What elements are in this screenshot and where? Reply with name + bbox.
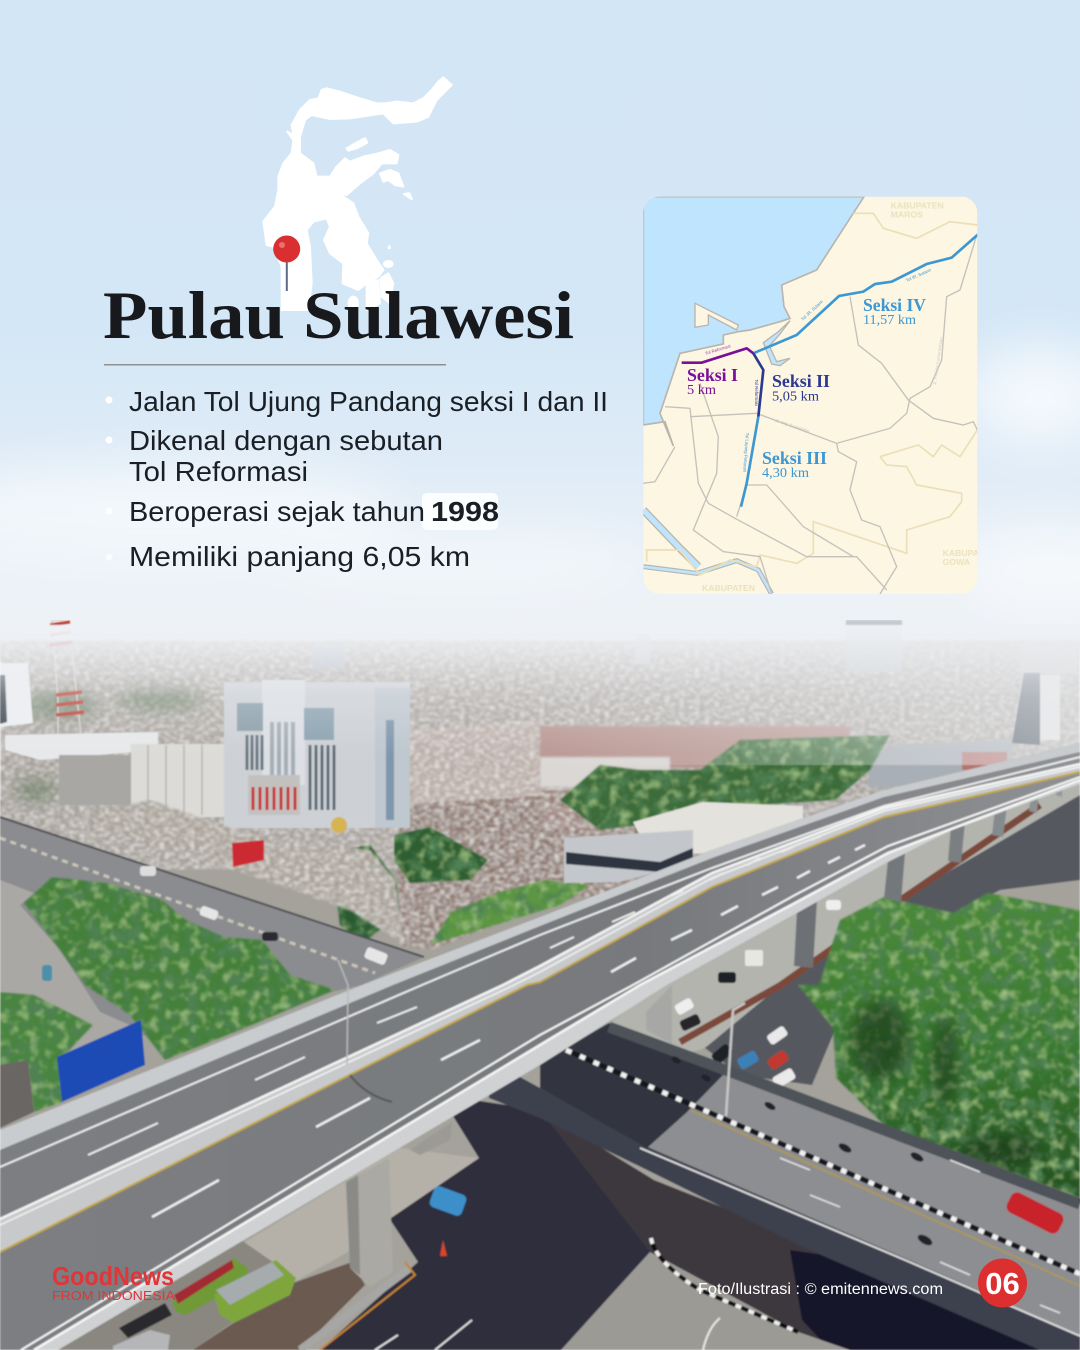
bay [763, 321, 790, 366]
under-deck pavement right [560, 780, 1080, 1060]
deck [0, 743, 1080, 1350]
green truck [214, 1260, 296, 1323]
harbour pier [695, 303, 738, 330]
light pavement [240, 1148, 479, 1285]
left road with median [0, 817, 424, 1065]
red car [1004, 1190, 1066, 1236]
right low buildings [868, 740, 1012, 787]
blue-stripe building [564, 830, 693, 883]
side face [489, 1060, 1080, 1350]
lamp post on deck [338, 960, 348, 1065]
road surface [540, 1023, 1080, 1335]
bridge shadow [540, 1023, 723, 1148]
far barrier [0, 743, 1080, 1150]
motorbikes [670, 1055, 934, 1247]
white flat building [633, 802, 803, 855]
striped curb [651, 1238, 798, 1332]
cars under deck [674, 900, 841, 1089]
Seksi I label: Seksi I [687, 365, 738, 385]
lamp post [726, 1003, 745, 1116]
lower side face [34, 780, 1080, 1350]
main flyover [0, 743, 1080, 1350]
pale houses behind main tower [410, 720, 540, 805]
guardrail [300, 1268, 410, 1350]
Seksi II label: 5,05 km [772, 390, 819, 404]
route map panel [643, 197, 996, 594]
tiny road labels: Tol Layang Pettarani [742, 433, 750, 472]
service road right [705, 795, 1080, 1085]
photo scene [0, 620, 1080, 1350]
cars left road [42, 866, 388, 981]
shaded ground [790, 1250, 1040, 1350]
year: 1998 [431, 496, 499, 527]
bullet 2: Dikenal dengan sebutan [129, 425, 443, 456]
low white building [5, 732, 158, 760]
side barrier [609, 1027, 1080, 1204]
GoodNews logo [52, 1261, 175, 1303]
city rooftops [0, 640, 1080, 870]
lamp [703, 1318, 720, 1350]
page number badge: 06 [985, 1266, 1020, 1301]
map labels [687, 295, 926, 481]
billboard [57, 1020, 145, 1102]
main office tower [224, 680, 410, 828]
orange cone [440, 1240, 447, 1256]
Seksi III label [762, 448, 827, 481]
district boundaries [647, 213, 977, 575]
land [643, 197, 977, 594]
houses in the middle [396, 790, 640, 950]
road under barrier [40, 1240, 296, 1350]
district labels: KABUPATEN [702, 583, 755, 593]
tiny road labels: Tol Reformasi [754, 379, 759, 406]
rivers [643, 510, 772, 594]
tree shadow patches [850, 1000, 1040, 1166]
lane marks [780, 1158, 1060, 1313]
tiny road labels: Jl. Perintis Kemerdekaan [932, 336, 944, 385]
island map: Sulawesi silhouette [263, 77, 452, 310]
striped curb highlight [651, 1238, 798, 1332]
Seksi II route [753, 353, 763, 417]
photo credit: Foto/Ilustrasi : © emitennews.com [698, 1281, 943, 1298]
tiny road labels: Tol IR. Sutami [905, 267, 932, 283]
road lines [375, 1320, 472, 1350]
second flyover [489, 1003, 1080, 1350]
Seksi I route [682, 348, 753, 363]
grey roads [643, 233, 977, 594]
bullet dots [106, 396, 112, 560]
Seksi III route [741, 417, 758, 507]
columns of the main flyover [346, 780, 1063, 1287]
tiny road labels: Tol Reformasi [704, 343, 731, 356]
tiny road labels [704, 267, 944, 472]
brown strip [193, 1262, 365, 1350]
bullet list [106, 386, 608, 572]
side block building [59, 744, 225, 817]
district labels: GOWA [943, 557, 971, 567]
wall [0, 1060, 34, 1128]
sky background [0, 0, 1080, 660]
haze overlay [0, 625, 1080, 765]
red-top truck [172, 1258, 248, 1315]
left white tower [0, 663, 33, 727]
right office tower [1012, 673, 1060, 745]
ground under second flyover [540, 1110, 1080, 1350]
striped median [566, 1050, 1080, 1286]
Seksi II label [772, 371, 830, 404]
Seksi I label: 5 km [687, 383, 716, 398]
deck lane lines [0, 757, 1080, 1350]
rear car [119, 1303, 172, 1338]
sign shadow [350, 1075, 392, 1102]
light plaza [561, 1252, 850, 1350]
parking and small shops [60, 800, 405, 945]
communication tower [50, 620, 84, 745]
Seksi IV label: Seksi IV [863, 295, 926, 315]
brown median [680, 805, 1040, 1042]
dark asphalt [320, 1095, 660, 1350]
title divider [104, 364, 446, 366]
red roof rows [540, 726, 850, 830]
trees left [0, 877, 335, 1112]
distant greenery [13, 690, 205, 800]
bullet 1: Jalan Tol Ujung Pandang seksi I dan II [129, 386, 608, 417]
edge line [640, 1148, 1080, 1336]
bullet 2 second line: Tol Reformasi [129, 456, 308, 487]
sea [643, 197, 864, 446]
bullet 4: Memiliki panjang 6,05 km [129, 541, 470, 572]
Seksi III label: Seksi III [762, 448, 827, 468]
scene base fill [0, 800, 1080, 1350]
Seksi I label [687, 365, 738, 398]
Seksi II label: Seksi II [772, 371, 830, 391]
district labels: MAROS [891, 209, 923, 219]
median barrier [0, 763, 1080, 1252]
silver car [113, 1330, 170, 1350]
tiny road labels: Tol JR. Sutami [800, 299, 824, 322]
district labels: KABUPATEN [943, 548, 996, 558]
hazy distant towers [312, 620, 1077, 674]
bajaj [428, 1185, 468, 1217]
trees right [798, 893, 1080, 1198]
Seksi IV label [863, 295, 926, 328]
year highlight [422, 493, 498, 530]
ground under the flyovers [0, 780, 1080, 1350]
orange line [320, 1262, 415, 1350]
bullet 3: Beroperasi sejak tahun [129, 496, 425, 527]
page number badge [978, 1258, 1027, 1308]
Seksi IV route [753, 235, 977, 353]
title: Pulau Sulawesi [103, 277, 574, 353]
tiny road labels: Jl. Urip Sumoharjo [775, 418, 811, 434]
district labels [702, 200, 996, 593]
gold dome [331, 817, 347, 833]
district labels: KABUPATEN [891, 200, 944, 210]
Seksi IV label: 11,57 km [863, 313, 916, 328]
trucks and cars [113, 1258, 296, 1350]
location pin [273, 236, 300, 291]
Seksi III label: 4,30 km [762, 466, 809, 481]
trees band [330, 735, 890, 945]
GoodNews logo: GoodNews [52, 1261, 174, 1291]
GoodNews logo: FROM INDONESIA [52, 1288, 175, 1303]
